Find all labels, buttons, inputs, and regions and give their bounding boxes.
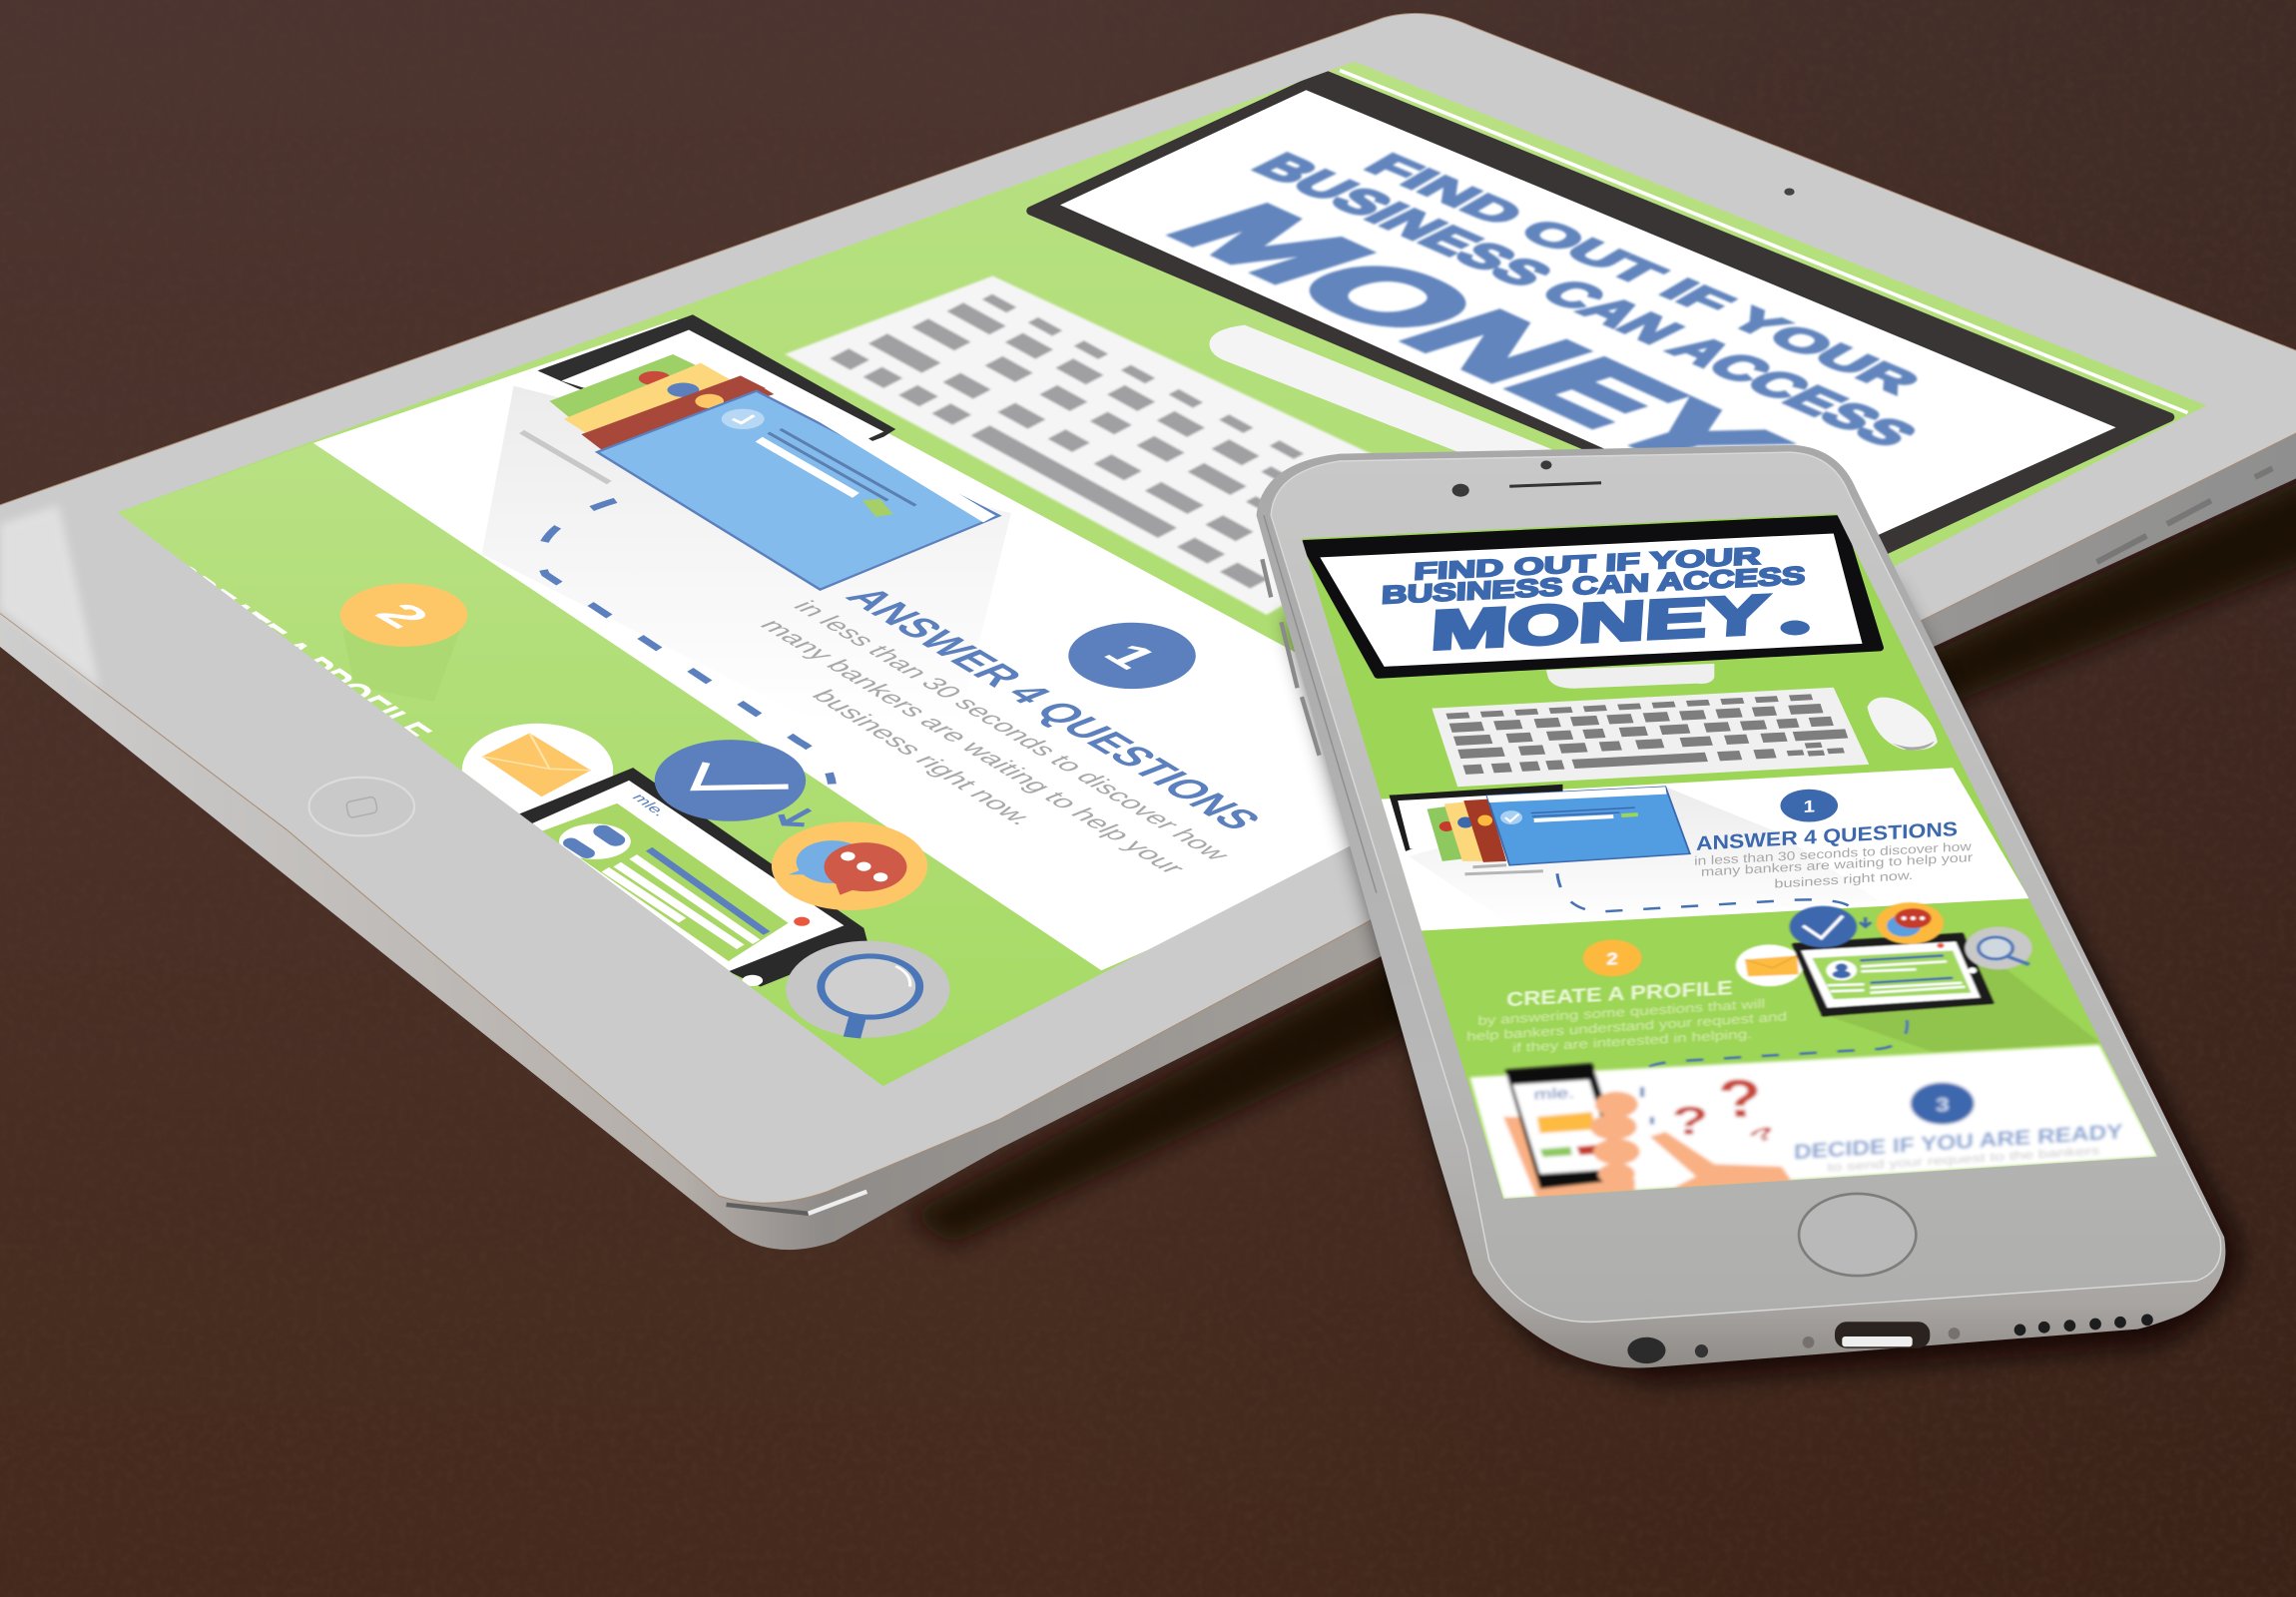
phone title: FIND OUT IF YOUR [1414,543,1761,585]
icon: pointing hand [1650,1132,1794,1189]
icon: magnifier [786,941,949,1038]
step 1 badge: 1 [1090,638,1170,675]
phone device [1257,445,2225,1368]
tablet title [1165,150,1919,448]
phone side buttons [1262,559,1320,756]
tablet device [0,13,2296,1250]
icon: envelope [462,724,613,817]
long shadow of windows [1409,787,1880,925]
step 2 heading clipped by bezel: CREATE A PROFILE [144,559,442,748]
icon: profile tablet [1794,934,1993,1015]
question marks: ? [1745,1122,1781,1148]
tablet keyboard [785,274,1373,616]
phone monitor white screen [1320,534,1863,667]
tablet monitor stand [1210,325,1552,457]
phone chrome edge line [1264,515,1377,893]
step 1 heading: ANSWER 4 QUESTIONS [835,582,1273,835]
step 2 badge shadow [342,625,462,702]
step 2 description: help bankers understand your request and [1466,1009,1787,1044]
phone mouse [1867,698,1938,750]
tablet home button [309,778,414,835]
step 2 badge [340,584,467,647]
icon: chat bubbles [772,821,927,910]
step 2 number: 2 [1606,950,1618,969]
stack of browser windows [1428,787,1690,874]
phone title period [1780,621,1810,635]
phone home button [1799,1194,1916,1276]
icon: chat bubbles [1877,902,1944,944]
chrome highlight on tablet corner [727,1192,866,1214]
tablet shadow [907,461,2296,1245]
step 1 description: business right now. [1774,869,1913,891]
tablet screen green background [117,62,2207,1086]
tablet front glass [0,13,2296,1203]
step 1 description: in less than 30 seconds to discover how [787,597,1238,863]
tablet white section [311,319,1362,970]
phone title [1381,543,1806,661]
small laptop screen [1398,792,1561,848]
tablet green section [116,443,1107,1086]
tablet steps artwork [116,314,1273,1086]
phone step 2 section [1466,902,2099,1070]
step 2 heading: CREATE A PROFILE [1506,976,1733,1011]
icon: hand holding phone: mle. [1534,1084,1574,1103]
glare on tablet corner [0,505,100,688]
tablet front camera [1784,188,1795,196]
phone earpiece and camera [1452,460,1601,497]
tablet monitor frame [1031,75,2170,562]
icon: check mark circle [1790,906,1857,947]
phone step 3 section [1469,1045,2157,1199]
step 2 description: if they are interested in helping. [1512,1027,1752,1056]
icon: magnifier [1965,926,2032,969]
icon: small tablet with profile: mle. [628,792,672,818]
small arrow to phone [1642,1087,1652,1124]
phone title: MONEY [1430,584,1770,661]
tablet monitor highlight stripe [1340,70,2187,413]
step 1 description: in less than 30 seconds to discover how [1694,839,1972,868]
phone screen [1302,514,2157,1199]
step 1 badge [1068,623,1196,689]
icon: small arrow [1860,917,1871,926]
phone green background [1302,514,2157,1199]
step 2 description: by answering some questions that will [1477,997,1765,1028]
step 2 badge: 2 [362,597,441,634]
dashed path step 1 to 2 [1557,873,1849,912]
phone title: BUSINESS CAN ACCESS [1381,562,1806,609]
step 2 badge [1583,939,1641,976]
icon: small tablet with profile [518,768,867,986]
step 3 heading: DECIDE IF YOU ARE READY [1794,1119,2122,1164]
tablet side buttons [2097,468,2273,562]
phone keyboard [1432,688,1869,787]
front blue browser window [597,391,999,590]
phone monitor stand [1546,664,1714,689]
dashed path step 2 to 3 [1644,1020,1908,1070]
step 2 description [1466,997,1787,1056]
icon: envelope [1736,944,1803,986]
question marks [1671,1070,1781,1148]
icon: check mark circle [655,740,806,821]
phone metal body [1257,445,2225,1368]
phone speaker, camera and screen content [1302,460,2157,1199]
phone front glass [1271,452,2221,1322]
small laptop frame [522,314,895,483]
step 1 description: many bankers are waiting to help your [1701,849,1973,878]
step 1 description [1694,839,1973,891]
phone bottom ports [1627,1315,2153,1363]
step 2 long shadow [1818,934,2099,1052]
tablet monitor white screen [1060,90,2116,553]
step 1 number: 1 [1803,798,1816,816]
long shadow behind windows [482,385,1010,579]
step 1 heading: ANSWER 4 QUESTIONS [1696,817,1958,854]
step 1 description: business right now. [806,686,1042,828]
tablet screen [116,62,2207,1086]
icon: hand holding phone [1503,1063,1640,1199]
step 3 badge [1911,1083,1975,1124]
tablet title: BUSINESS CAN ACCESS [1240,147,1930,453]
step 1 badge [1780,790,1838,822]
step 3 white panel [1469,1045,2157,1199]
tablet title: FIND OUT IF YOUR [1354,148,1931,399]
small laptop [1390,785,1562,851]
phone monitor frame [1305,519,1880,675]
stack of browser windows [549,354,999,590]
dashed path step 1 to 2 [541,500,832,784]
tablet metal rim [0,13,2296,1250]
step 3 number: 3 [1936,1093,1950,1116]
question marks: ? [1671,1098,1709,1143]
step 3 description: to send your request to the bankers [1828,1145,2099,1175]
icon: small arrow [781,809,810,824]
phone step 1 section [1382,768,2029,930]
question marks: ? [1716,1070,1765,1129]
step 1 description: many bankers are waiting to help your [754,616,1193,877]
phone shadow [1289,586,2240,1383]
tablet title: MONEY [1134,193,1816,482]
step 1 white panel [1382,768,2029,930]
